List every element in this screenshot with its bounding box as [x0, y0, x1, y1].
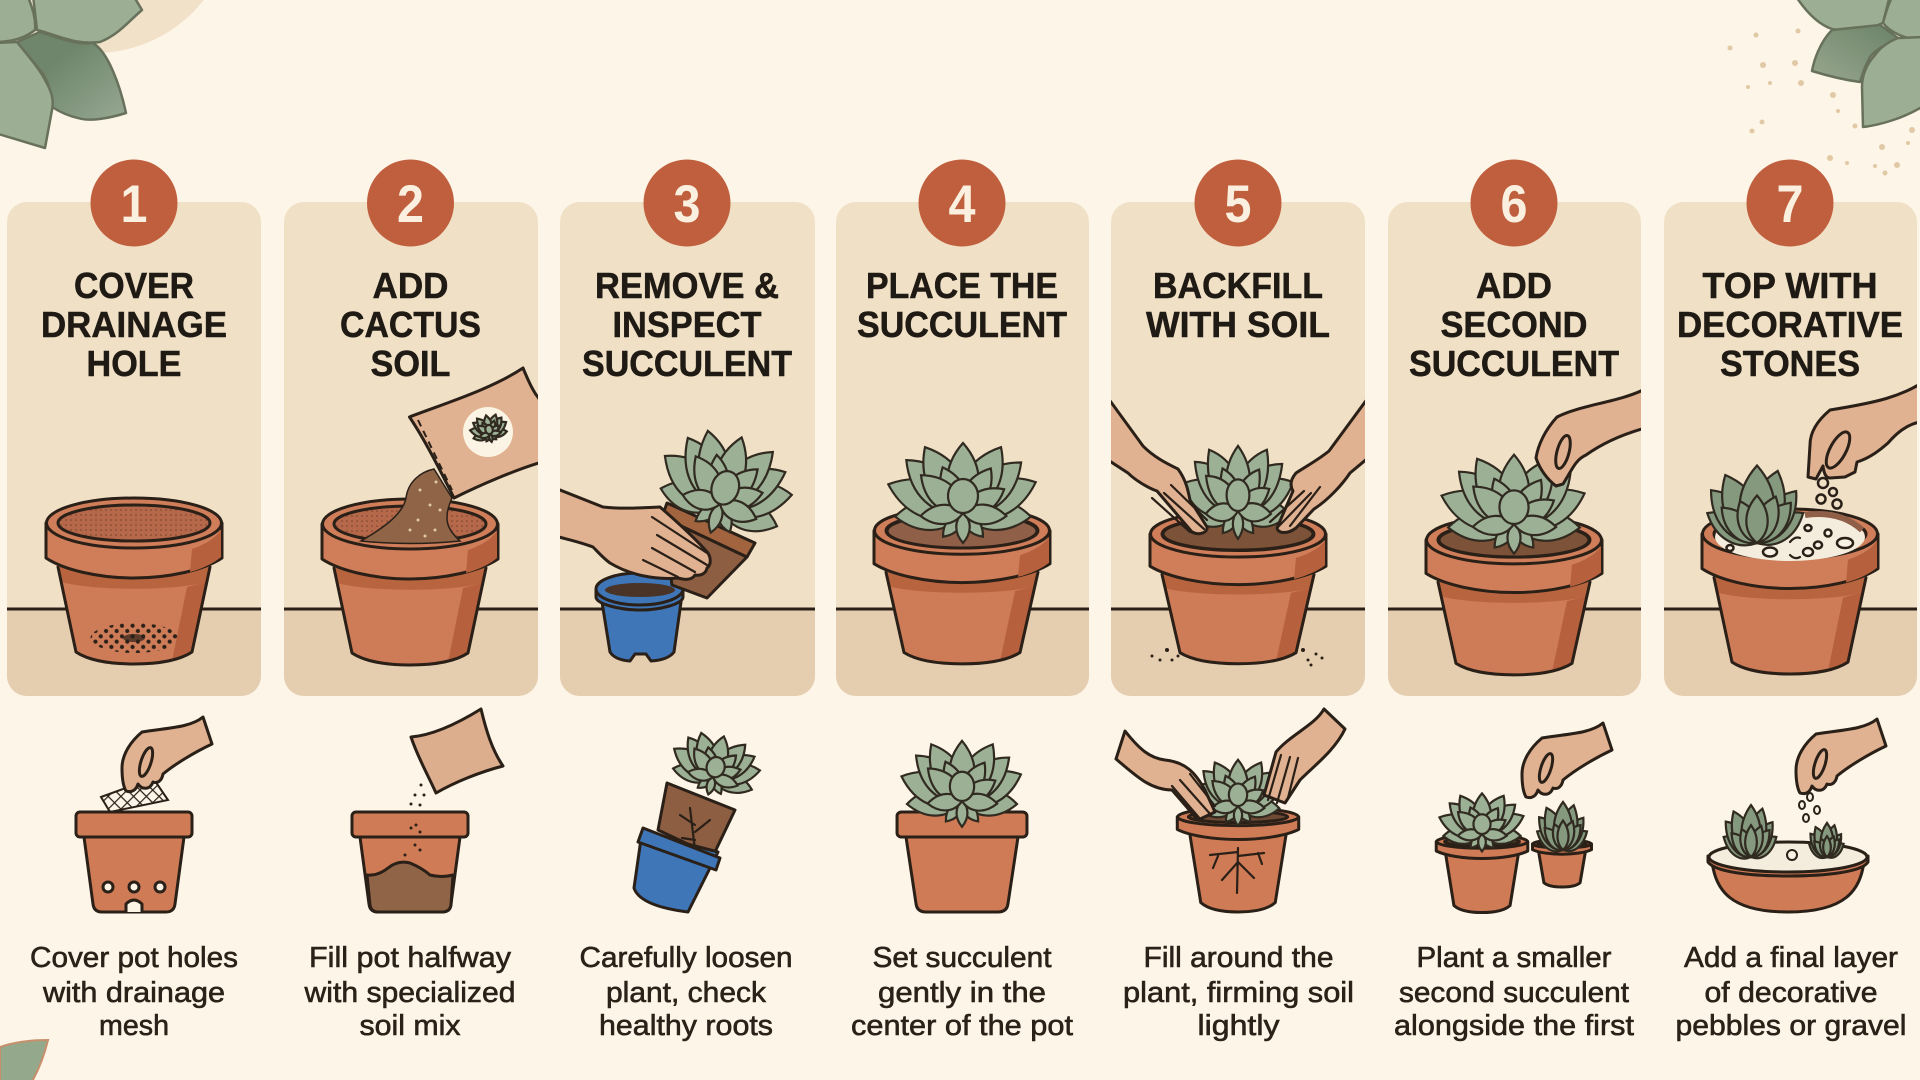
- decoration: top-right succulent: [1728, 0, 1920, 176]
- caption 6: [1394, 942, 1634, 1042]
- number badge 4: 4: [948, 175, 976, 234]
- hands firming soil: [1108, 398, 1368, 534]
- heading 4: PLACE THE: [866, 265, 1058, 306]
- number badge 5: 5: [1224, 175, 1252, 234]
- caption 5: plant, firming soil: [1123, 977, 1354, 1009]
- caption 3: Carefully loosen: [580, 942, 792, 974]
- hand holding pot: [555, 488, 710, 579]
- potted succulent: [874, 439, 1050, 664]
- caption 6: alongside the first: [1394, 1010, 1634, 1042]
- caption 4: center of the pot: [851, 1010, 1073, 1042]
- caption 4: Set succulent: [872, 942, 1052, 974]
- heading 7: TOP WITH: [1702, 265, 1878, 306]
- panel: step 7: [1664, 160, 1920, 696]
- decoration: bottom-left leaf: [0, 1040, 48, 1080]
- number badge 2: [367, 160, 454, 246]
- heading 3: SUCCULENT: [582, 343, 792, 384]
- number badge 2: 2: [397, 175, 424, 234]
- caption 7: of decorative: [1704, 977, 1878, 1009]
- number badge 3: 3: [674, 175, 700, 234]
- panel: step 3: [555, 160, 815, 696]
- heading 6: ADD: [1476, 265, 1552, 306]
- caption 3: plant, check: [606, 977, 767, 1009]
- heading 1: [41, 265, 227, 384]
- caption 4: [851, 942, 1073, 1042]
- falling stones: [1816, 478, 1842, 508]
- root ball and succulent: [641, 411, 811, 598]
- caption 5: lightly: [1198, 1010, 1280, 1042]
- panel: step 6: [1388, 160, 1645, 696]
- soil bag: [410, 368, 542, 498]
- pot with drainage mesh: [46, 498, 222, 664]
- pot with gravel and succulent: [1699, 466, 1878, 674]
- caption 2: soil mix: [360, 1010, 461, 1042]
- caption 7: Add a final layer: [1684, 942, 1898, 974]
- heading 1: DRAINAGE: [41, 304, 227, 345]
- caption 5: [1123, 942, 1354, 1042]
- caption 1: Cover pot holes: [30, 942, 238, 974]
- number badge 7: 7: [1776, 175, 1804, 234]
- heading 4: SUCCULENT: [857, 304, 1067, 345]
- caption 7: [1676, 942, 1906, 1042]
- caption 1: mesh: [99, 1010, 169, 1042]
- hand dropping stones: [1808, 384, 1920, 479]
- heading 7: STONES: [1720, 343, 1860, 384]
- heading 5: [1146, 265, 1330, 345]
- heading 2: [340, 265, 481, 384]
- pot with soil pouring: [322, 469, 498, 665]
- small icon 2: half-filled pot and bag: [352, 709, 503, 912]
- heading 2: SOIL: [370, 343, 450, 384]
- heading 6: SUCCULENT: [1409, 343, 1619, 384]
- panel: step 4: [836, 160, 1089, 696]
- heading 6: SECOND: [1440, 304, 1588, 345]
- heading 5: BACKFILL: [1153, 265, 1323, 306]
- heading 2: ADD: [372, 265, 448, 306]
- caption 7: pebbles or gravel: [1676, 1010, 1906, 1042]
- small icon 5: pot with roots and two hands: [1116, 709, 1345, 912]
- heading 4: [857, 265, 1067, 345]
- caption 2: Fill pot halfway: [309, 942, 512, 974]
- heading 5: WITH SOIL: [1146, 304, 1330, 345]
- caption 5: Fill around the: [1144, 942, 1334, 974]
- heading 1: HOLE: [86, 343, 182, 384]
- hand adding succulent: [1536, 389, 1645, 486]
- blue nursery pot: [596, 573, 683, 661]
- caption 3: [580, 942, 792, 1042]
- heading 3: [582, 265, 792, 384]
- number badge 5: [1194, 160, 1282, 246]
- number badge 1: 1: [120, 175, 148, 234]
- small icon 3: plant lifted out of blue pot: [634, 721, 771, 912]
- caption 1: with drainage: [42, 977, 225, 1009]
- pot, succulent and soil crumbs: [1150, 442, 1326, 666]
- panel: step 2: [284, 160, 542, 696]
- number badge 6: 6: [1500, 175, 1528, 234]
- heading 7: [1677, 265, 1903, 384]
- number badge 3: [644, 160, 730, 246]
- small icon 6: two potted succulents and hand: [1436, 723, 1612, 913]
- caption 4: gently in the: [878, 977, 1046, 1009]
- heading 7: DECORATIVE: [1677, 304, 1903, 345]
- small icon 4: potted succulent: [896, 737, 1027, 912]
- caption 1: [30, 942, 238, 1042]
- heading 2: CACTUS: [340, 304, 481, 345]
- caption 3: healthy roots: [599, 1010, 773, 1042]
- caption 6: second succulent: [1399, 977, 1629, 1009]
- number badge 1: [90, 160, 178, 246]
- small icon 7: bowl with pebbles and hand: [1708, 719, 1886, 912]
- number badge 6: [1470, 160, 1558, 246]
- heading 3: INSPECT: [612, 304, 762, 345]
- heading 6: [1409, 265, 1619, 384]
- caption 2: [303, 942, 516, 1042]
- decoration: top-left succulent: [0, 0, 233, 148]
- number badge 7: [1746, 160, 1834, 246]
- number badge 4: [918, 160, 1006, 246]
- pot with second succulent: [1426, 450, 1602, 675]
- panel: step 5: [1108, 160, 1368, 696]
- caption 2: with specialized: [303, 977, 516, 1009]
- heading 3: REMOVE &: [595, 265, 779, 306]
- small icon 1: pot with mesh and hand: [76, 717, 212, 912]
- heading 1: COVER: [74, 265, 194, 306]
- caption 6: Plant a smaller: [1416, 942, 1612, 974]
- panel: step 1: [7, 160, 261, 696]
